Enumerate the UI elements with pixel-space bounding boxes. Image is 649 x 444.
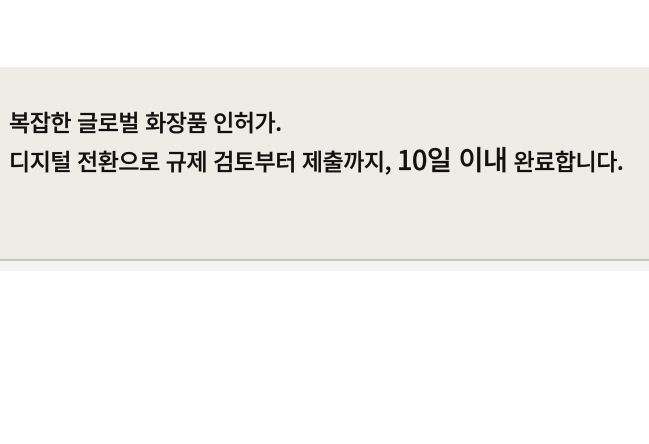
panel: headline background [0, 67, 649, 259]
light band below panel [0, 261, 649, 271]
heading line 2: 디지털 전환으로 규제 검토부터 제출까지, 10일 이내 완료합니다. [9, 139, 623, 178]
panel bottom border [0, 259, 649, 261]
heading line 1: 복잡한 글로벌 화장품 인허가. [9, 104, 282, 138]
